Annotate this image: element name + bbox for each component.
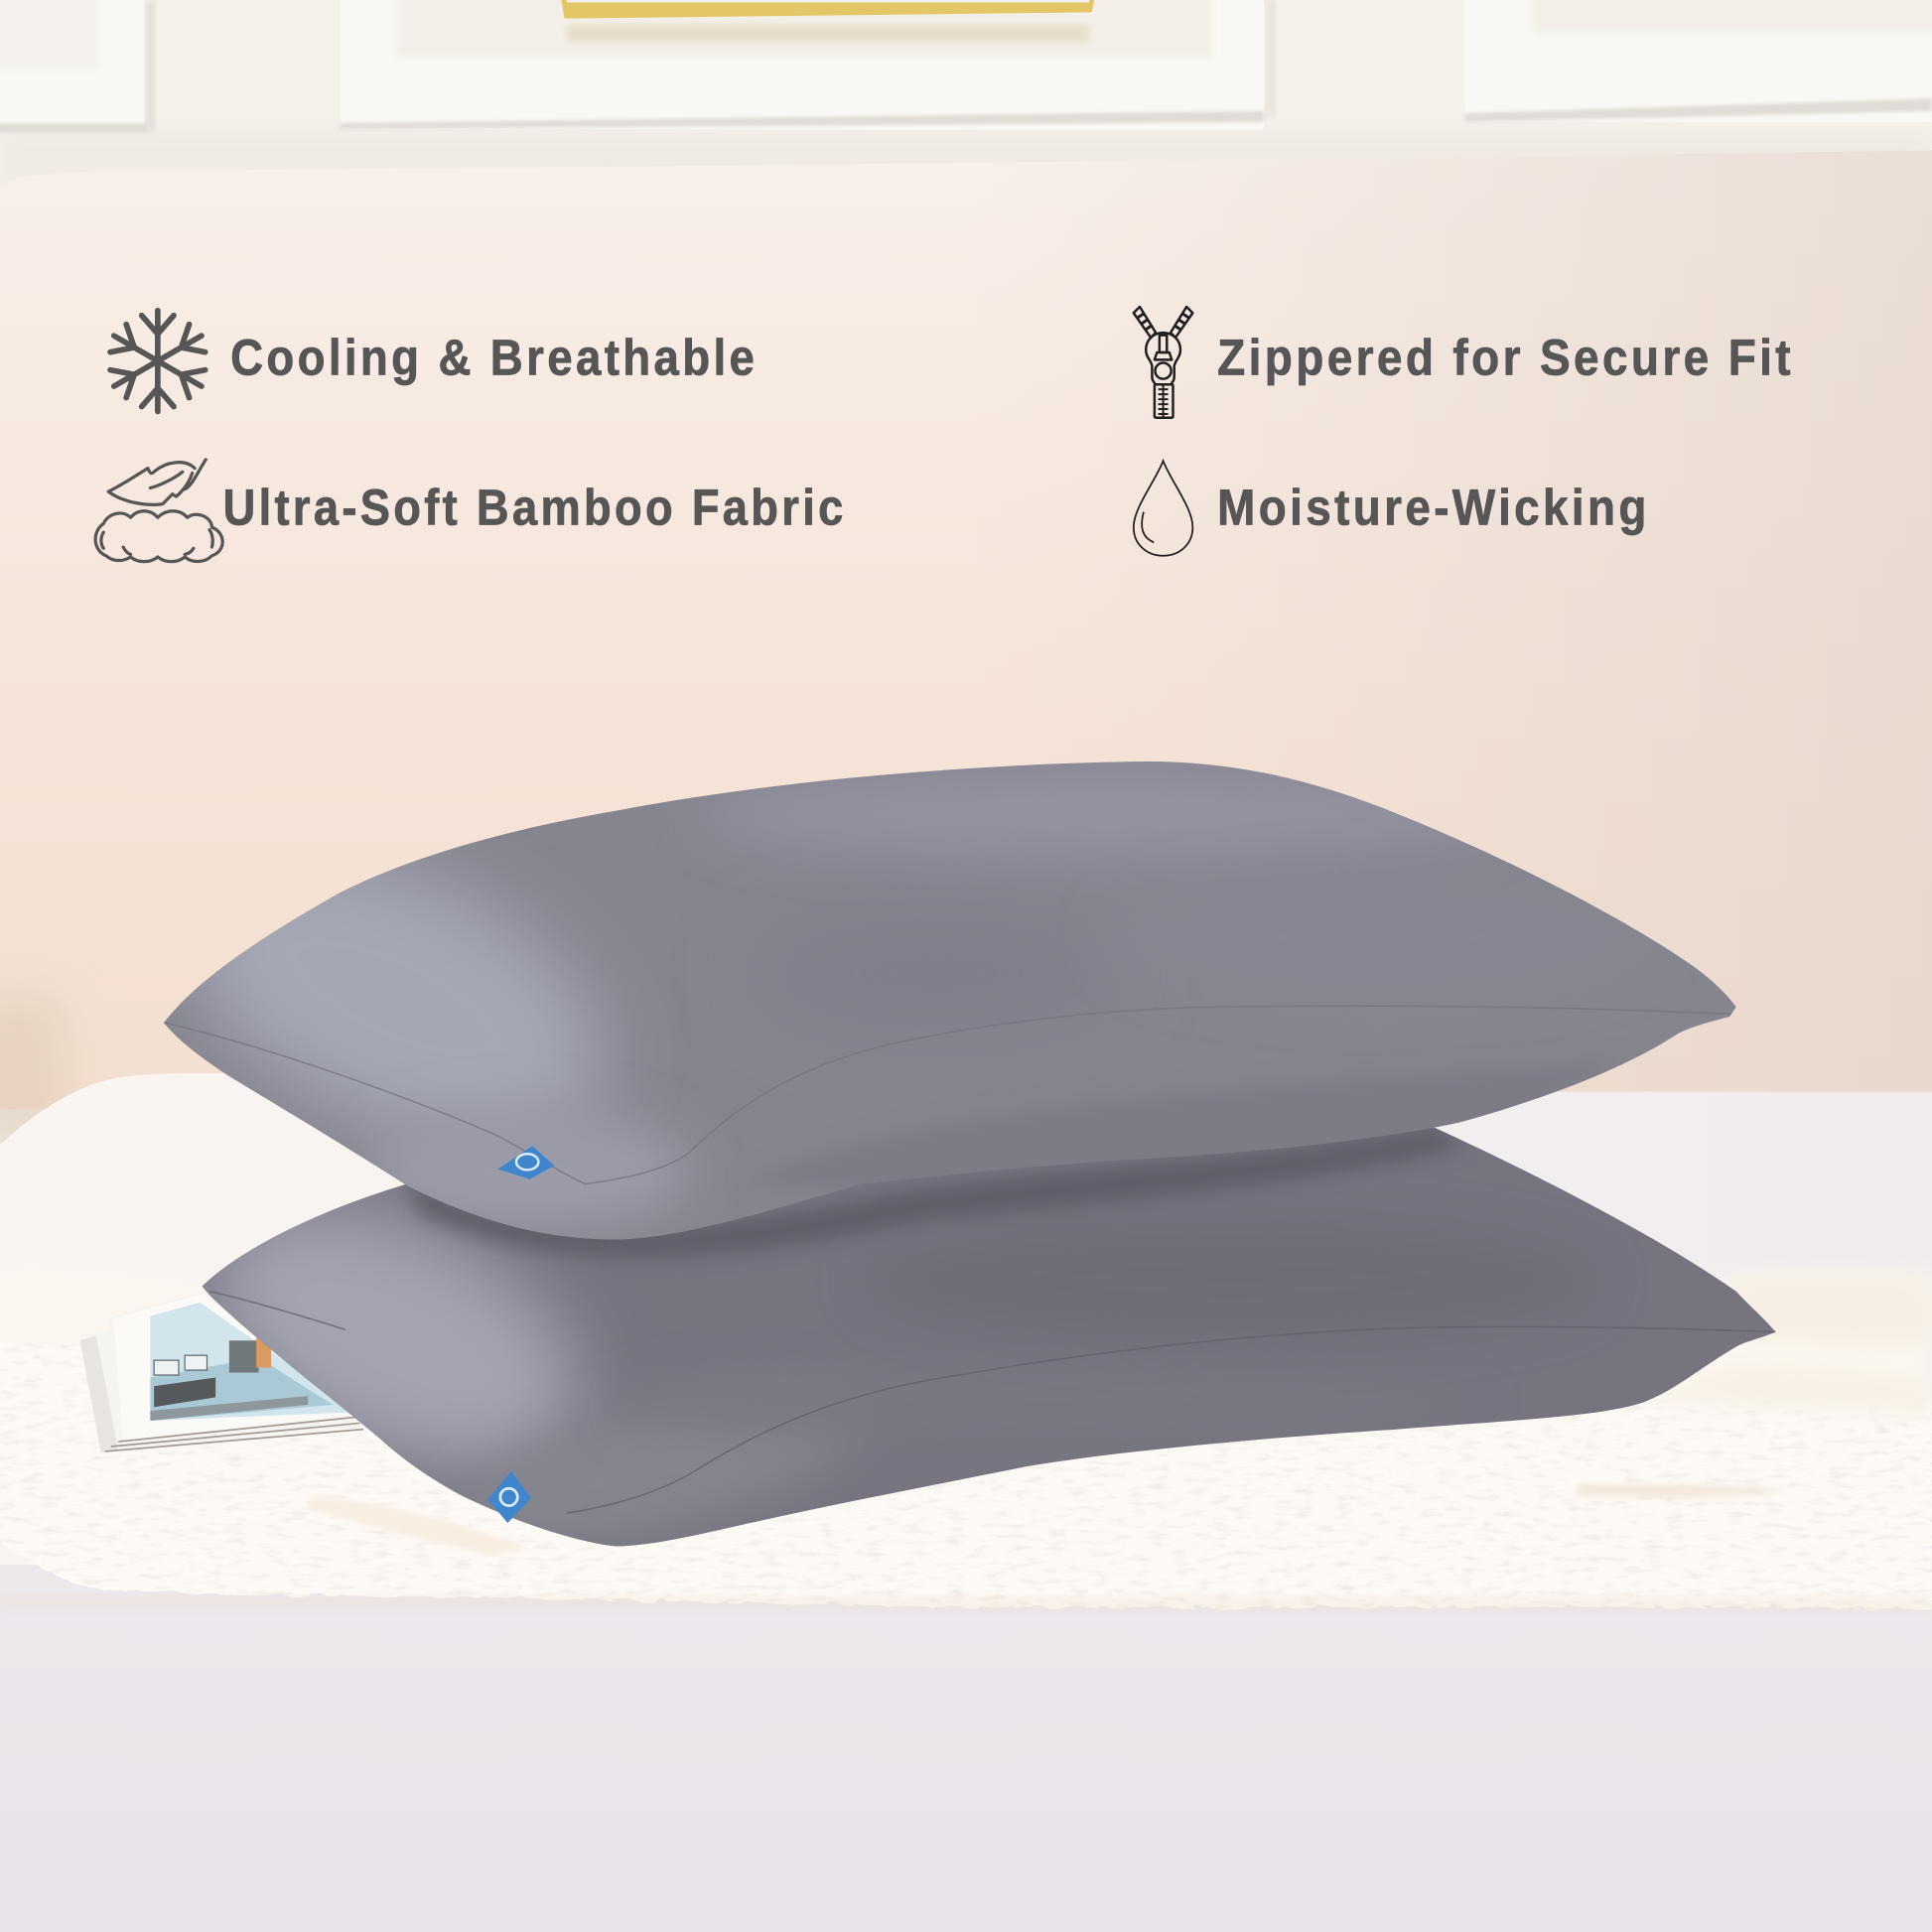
- feature: cooling and breathable: [106, 311, 758, 412]
- wall with moulding: [0, 0, 1932, 321]
- label: Moisture-Wicking: [1217, 480, 1650, 536]
- feature: zippered for secure fit: [1134, 307, 1794, 418]
- magazine photo: [150, 1303, 357, 1421]
- label: Ultra-Soft Bamboo Fabric: [223, 480, 847, 536]
- feature: ultra-soft bamboo fabric: [95, 460, 847, 562]
- magazine: [80, 1292, 363, 1452]
- icon: zipper: [1134, 307, 1192, 418]
- icon: feather over cloud: [95, 460, 222, 562]
- label: Zippered for Secure Fit: [1217, 329, 1794, 385]
- blurred back of throw: [0, 1269, 1932, 1453]
- seam: [209, 1292, 1775, 1513]
- icon: water drop: [1134, 461, 1192, 556]
- white knitted throw: [0, 1342, 1932, 1609]
- picture frame: [561, 0, 1095, 42]
- icon: snowflake: [106, 311, 209, 412]
- bed mattress: [0, 1073, 1932, 1932]
- feature: moisture-wicking: [1134, 461, 1650, 556]
- fold shadows on throw: [0, 1272, 1932, 1611]
- pillow: bottom: [169, 1128, 1775, 1580]
- label: Cooling & Breathable: [230, 329, 758, 385]
- pillow: top: [141, 761, 1736, 1240]
- brand tag: [487, 1471, 531, 1523]
- seam: [164, 1006, 1729, 1184]
- headboard: [0, 150, 1932, 1159]
- brand tag: [497, 1146, 554, 1179]
